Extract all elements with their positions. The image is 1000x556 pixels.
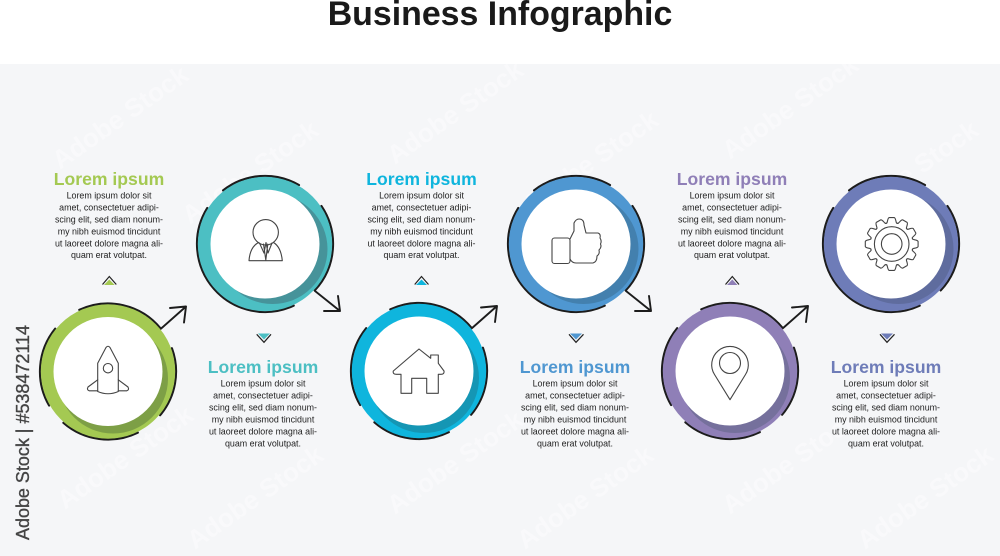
- step 5 text: Lorem ipsum dolor sit: [690, 190, 775, 200]
- step 4 text: my nibh euismod tincidunt: [524, 414, 627, 424]
- step 2 text: Lorem ipsum dolor sit: [221, 378, 306, 388]
- text: Adobe Stock: [716, 49, 864, 165]
- step 6 text: quam erat volutpat.: [848, 438, 924, 448]
- text: Adobe Stock: [716, 404, 864, 520]
- text: Adobe Stock: [51, 399, 199, 515]
- step 1 text: Lorem ipsum dolor sit: [67, 190, 152, 200]
- step 3 text: quam erat volutpat.: [384, 250, 459, 260]
- step 2 text: scing elit, sed diam nonum-: [209, 402, 317, 412]
- step 1 text: my nibh euismod tincidunt: [58, 226, 161, 236]
- step 2 text: amet, consectetuer adipi-: [213, 390, 313, 400]
- step 3 text: Lorem ipsum dolor sit: [379, 190, 464, 200]
- step 4 text: [520, 357, 630, 448]
- step 3 text: amet, consectetuer adipi-: [372, 202, 471, 212]
- step 3 text: my nibh euismod tincidunt: [370, 226, 473, 236]
- step 5 text: amet, consectetuer adipi-: [682, 202, 782, 212]
- step 6 text: amet, consectetuer adipi-: [836, 390, 936, 400]
- step 4 text: Lorem ipsum: [520, 357, 630, 377]
- step 5 text: scing elit, sed diam nonum-: [678, 214, 786, 224]
- icon: map pin: [712, 346, 748, 400]
- step 1 marker: up chevron: [102, 276, 116, 285]
- icon: gear: [865, 218, 918, 270]
- step 1 text: Lorem ipsum: [54, 169, 164, 189]
- step 3 text: scing elit, sed diam nonum-: [367, 214, 476, 224]
- text: Adobe Stock: [516, 104, 664, 220]
- step 4 text: scing elit, sed diam nonum-: [521, 402, 629, 412]
- text: Adobe Stock: [176, 114, 324, 230]
- step 5 text: quam erat volutpat.: [694, 250, 770, 260]
- step 1 text: amet, consectetuer adipi-: [59, 202, 159, 212]
- text: Adobe Stock: [836, 114, 984, 230]
- step 2: teal circle with person: [197, 176, 340, 312]
- step 6 text: Lorem ipsum: [831, 357, 941, 377]
- step 1 text: ut laoreet dolore magna ali-: [55, 238, 163, 248]
- step 3 text: [366, 169, 477, 260]
- step 6 text: [831, 357, 941, 448]
- step 4 marker: down chevron: [569, 334, 584, 342]
- step 6 marker: down chevron: [880, 334, 894, 342]
- step 4 text: Lorem ipsum dolor sit: [533, 378, 618, 388]
- step 6: indigo circle with gear: [823, 176, 959, 312]
- step 5: purple circle with map pin: [662, 303, 808, 439]
- step 5 text: my nibh euismod tincidunt: [681, 226, 784, 236]
- step 5 text: Lorem ipsum: [677, 169, 787, 189]
- stock credit: Adobe Stock | #538472114: [13, 325, 33, 540]
- icon: rocket: [87, 346, 129, 394]
- step 6 text: scing elit, sed diam nonum-: [832, 402, 940, 412]
- icon: house: [393, 349, 444, 393]
- step 4 text: quam erat volutpat.: [537, 438, 613, 448]
- icon: person: [249, 220, 282, 261]
- step 2 marker: down chevron: [257, 334, 271, 342]
- step 1 text: scing elit, sed diam nonum-: [55, 214, 163, 224]
- text: Adobe Stock: [181, 439, 329, 555]
- step 5 marker: up chevron: [726, 276, 739, 285]
- step 2 text: my nibh euismod tincidunt: [212, 414, 315, 424]
- step 2 text: ut laoreet dolore magna ali-: [209, 426, 317, 436]
- step 4 text: ut laoreet dolore magna ali-: [521, 426, 629, 436]
- text: Adobe Stock: [46, 59, 194, 175]
- step 3 marker: up chevron: [415, 276, 428, 285]
- text: Adobe Stock: [851, 439, 999, 555]
- step 3: cyan circle with house: [351, 303, 497, 439]
- step 1 text: quam erat volutpat.: [71, 250, 147, 260]
- step 2 text: Lorem ipsum: [208, 357, 318, 377]
- step 4 text: amet, consectetuer adipi-: [525, 390, 625, 400]
- text: Adobe Stock: [511, 439, 659, 555]
- step 4: blue circle with thumbs up: [508, 176, 651, 312]
- step 3 text: ut laoreet dolore magna ali-: [367, 238, 476, 248]
- step 6 text: Lorem ipsum dolor sit: [844, 378, 929, 388]
- step 1: green circle with rocket: [40, 304, 186, 439]
- step 5 text: [677, 169, 787, 260]
- step 1 text: [54, 169, 164, 260]
- step 6 text: my nibh euismod tincidunt: [835, 414, 938, 424]
- step 3 text: Lorem ipsum: [366, 169, 477, 189]
- text: Adobe Stock: [381, 54, 529, 170]
- text: Adobe Stock: [381, 404, 529, 520]
- step 2 text: quam erat volutpat.: [225, 438, 301, 448]
- step 2 text: [208, 357, 318, 448]
- step 5 text: ut laoreet dolore magna ali-: [678, 238, 786, 248]
- step 6 text: ut laoreet dolore magna ali-: [832, 426, 940, 436]
- icon: thumbs up: [552, 219, 601, 264]
